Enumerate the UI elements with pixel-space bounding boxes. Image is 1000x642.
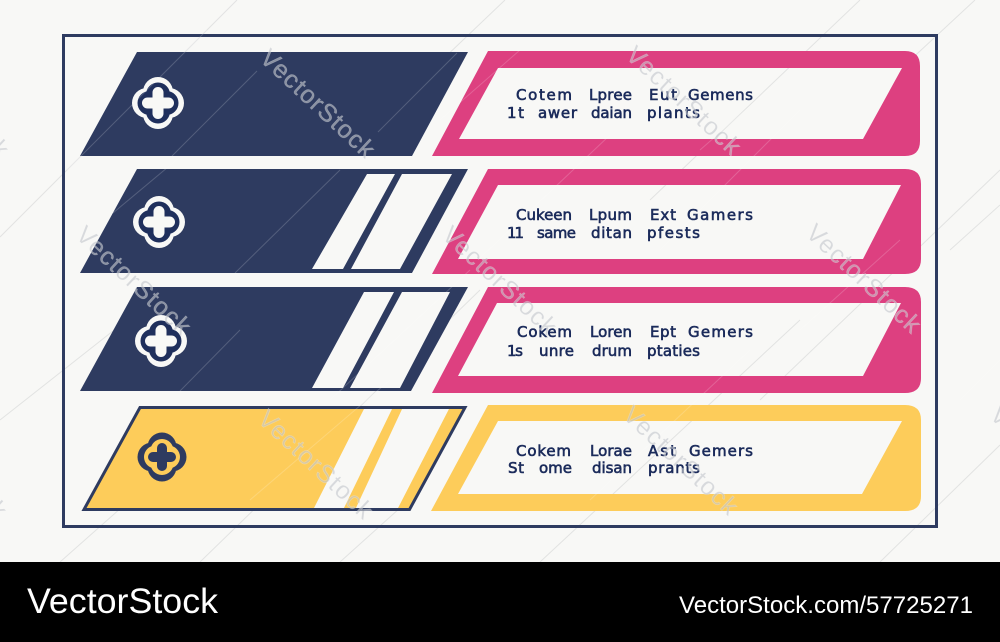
diagonal watermark lines over the artwork bbox=[67, 30, 1000, 500]
text block 3 bbox=[507, 323, 753, 360]
watermarks: VectorStock bbox=[70, 221, 197, 341]
text block 4: ome bbox=[539, 459, 572, 477]
row 3 bbox=[80, 287, 921, 393]
icon: plus clover 3 bbox=[150, 330, 172, 352]
navy banner 3 bbox=[80, 287, 468, 391]
footer image id: VectorStock.com/57725271 bbox=[679, 592, 973, 619]
pink text panel 3 bbox=[432, 287, 921, 393]
text block 2: Ext bbox=[650, 206, 676, 224]
footer brand: VectorStock bbox=[27, 582, 219, 621]
white stripes 2 bbox=[312, 174, 452, 269]
text block 4: Lorae bbox=[590, 442, 632, 460]
text block 2 bbox=[507, 206, 753, 242]
text block 2: ditan bbox=[591, 224, 632, 242]
white stripes 3 bbox=[312, 292, 450, 388]
row 4 bbox=[84, 405, 921, 511]
text block 3: drum bbox=[592, 342, 632, 360]
text block 3: Gemers bbox=[688, 323, 753, 341]
yellow banner 4 bbox=[84, 407, 465, 510]
text block 2: 11 bbox=[507, 224, 524, 242]
text block 1: Eut bbox=[649, 86, 677, 104]
row 1 bbox=[80, 51, 920, 156]
icon: plus clover 4 bbox=[152, 447, 172, 467]
text block 4: prants bbox=[648, 459, 700, 477]
outer frame bbox=[64, 36, 936, 526]
text block 2: same bbox=[537, 224, 576, 242]
text block 4: Gemers bbox=[689, 442, 753, 460]
text block 4: Cokem bbox=[516, 442, 571, 460]
text block 2: pfests bbox=[647, 224, 700, 242]
text block 1: Cotem bbox=[516, 86, 572, 104]
text block 4: Ast bbox=[648, 442, 676, 460]
navy banner 2 bbox=[80, 169, 468, 273]
icon: plus clover 1 bbox=[147, 92, 169, 114]
row 2 bbox=[80, 169, 921, 274]
navy banner 1 bbox=[80, 52, 468, 156]
text block 4: St bbox=[508, 459, 524, 477]
text block 1: plants bbox=[647, 104, 700, 122]
text block 3: Ept bbox=[650, 323, 676, 341]
footer bar bbox=[0, 562, 1000, 642]
text block 3: Cokem bbox=[517, 323, 572, 341]
watermarks: VectorStock bbox=[617, 401, 744, 521]
watermarks: VectorStock bbox=[800, 219, 927, 339]
pink text panel 1 bbox=[432, 51, 920, 156]
watermarks: VectorStock bbox=[436, 221, 563, 341]
text block 4 bbox=[508, 442, 753, 477]
text block 3: ptaties bbox=[647, 342, 700, 360]
text block 1: daian bbox=[591, 104, 632, 122]
watermarks: VectorStock bbox=[620, 41, 747, 161]
pink text panel 2 bbox=[432, 169, 921, 274]
yellow text panel 4 bbox=[431, 405, 921, 511]
watermarks: VectorStock bbox=[254, 44, 381, 164]
banner 4 outline bbox=[84, 408, 465, 510]
text block 4: disan bbox=[592, 459, 632, 477]
text block 1: Gemens bbox=[688, 86, 753, 104]
text block 2: Lpum bbox=[589, 206, 632, 224]
text block 1: Lpree bbox=[589, 86, 632, 104]
watermarks bbox=[0, 41, 1000, 525]
watermarks: VectorStock bbox=[252, 405, 379, 525]
text block 1: 1t bbox=[507, 104, 524, 122]
icon: plus clover 2 bbox=[148, 211, 170, 233]
text block 2: Cukeen bbox=[516, 206, 572, 224]
text block 1: awer bbox=[538, 104, 578, 122]
text block 1 bbox=[507, 86, 753, 122]
text block 2: Gamers bbox=[687, 206, 753, 224]
text block 3: unre bbox=[539, 342, 574, 360]
text block 3: Loren bbox=[590, 323, 632, 341]
text block 3: 1s bbox=[507, 342, 523, 360]
